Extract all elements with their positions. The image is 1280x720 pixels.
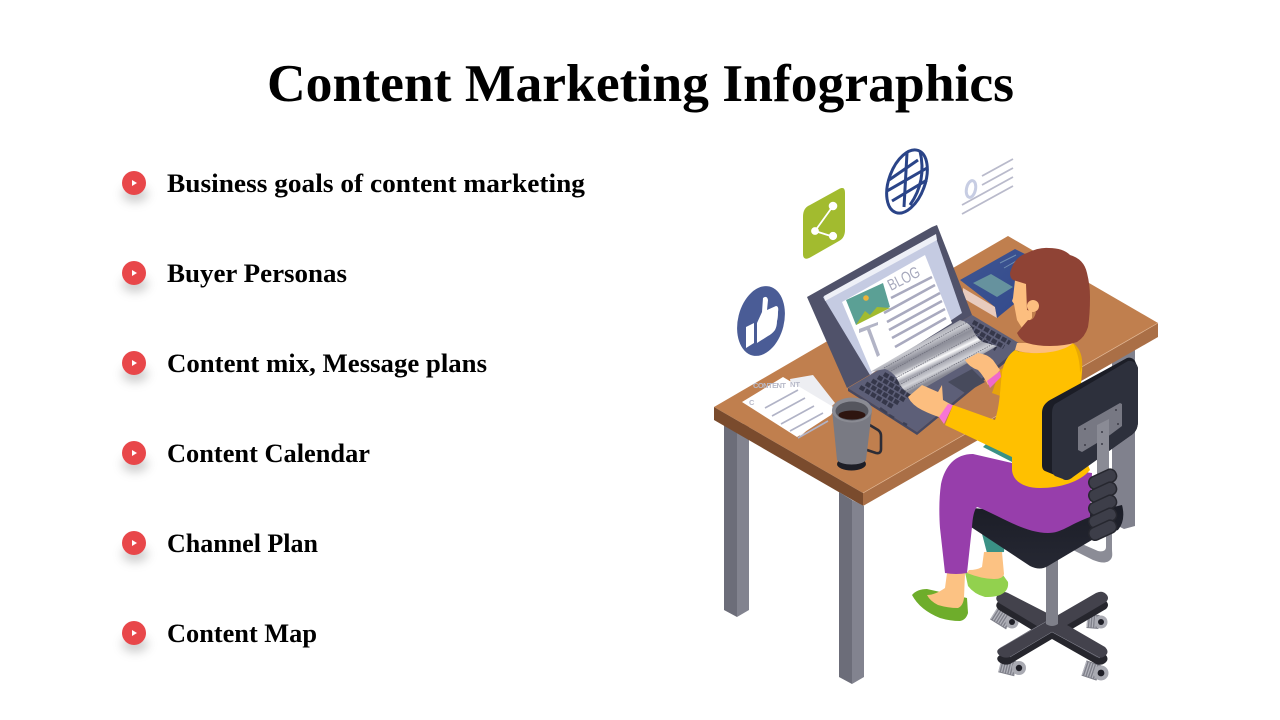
desk front leg <box>839 492 864 684</box>
near shoe <box>912 589 968 621</box>
woman: legs <box>912 530 1008 621</box>
near hand <box>908 385 953 424</box>
bullet list <box>122 168 585 652</box>
chair column <box>1046 560 1058 626</box>
list item: Content Calendar: Content Calendar <box>167 438 370 468</box>
keyboard keys <box>860 322 1010 407</box>
desk top <box>714 236 1158 506</box>
scrolling page <box>870 320 997 395</box>
hair <box>1010 248 1090 346</box>
woman: torso and arm <box>908 343 1090 488</box>
list item: Content Map <box>122 618 317 652</box>
blog page: BLOG <box>885 264 923 295</box>
list item: Content Map: Content Map <box>167 618 317 648</box>
laptop <box>807 225 1022 435</box>
list item: Buyer Personas: Buyer Personas <box>167 258 347 288</box>
chair base star <box>996 592 1108 665</box>
coffee mug <box>832 398 881 470</box>
touchpad <box>948 369 985 393</box>
far hand <box>965 353 1001 388</box>
papers <box>742 375 835 438</box>
list item: Channel Plan: Channel Plan <box>167 528 318 558</box>
papers: NT <box>790 380 800 389</box>
blog page <box>842 255 952 373</box>
books <box>960 249 1027 318</box>
chair spring <box>1087 467 1119 542</box>
laptop ports <box>880 408 907 425</box>
icon: share tile <box>803 188 845 259</box>
woman: purple trousers <box>939 454 1092 574</box>
chair <box>994 517 1112 680</box>
list item: Buyer Personas <box>122 258 347 292</box>
list item: Business goals: Business goals of content marketing <box>167 168 585 198</box>
icon: globe <box>879 144 935 219</box>
woman: head <box>1010 248 1090 346</box>
title: Content Marketing Infographics <box>267 55 1014 113</box>
far leg <box>981 530 1005 553</box>
papers: CONTENT <box>753 381 786 390</box>
list item: Content mix: Content mix, Message plans <box>167 348 487 378</box>
icon: thumbs up <box>730 281 792 361</box>
laptop base <box>848 315 1022 432</box>
shirt <box>945 343 1090 488</box>
ear <box>1027 300 1039 312</box>
desk back legs <box>724 345 1135 617</box>
chair lower bracket <box>1073 517 1112 562</box>
teal undershirt <box>983 441 1014 463</box>
illustration: woman at desk <box>714 144 1158 684</box>
chair back <box>1042 358 1138 542</box>
chair back plate <box>1078 403 1122 452</box>
far arm <box>992 366 1006 398</box>
neck <box>1015 343 1073 353</box>
list item: Channel Plan <box>122 528 318 562</box>
far shoe <box>965 572 1008 597</box>
laptop lid <box>807 225 972 388</box>
chair seat <box>971 505 1123 568</box>
chair casters <box>994 613 1108 680</box>
icon: document lines <box>962 159 1013 214</box>
papers: C <box>749 398 755 407</box>
